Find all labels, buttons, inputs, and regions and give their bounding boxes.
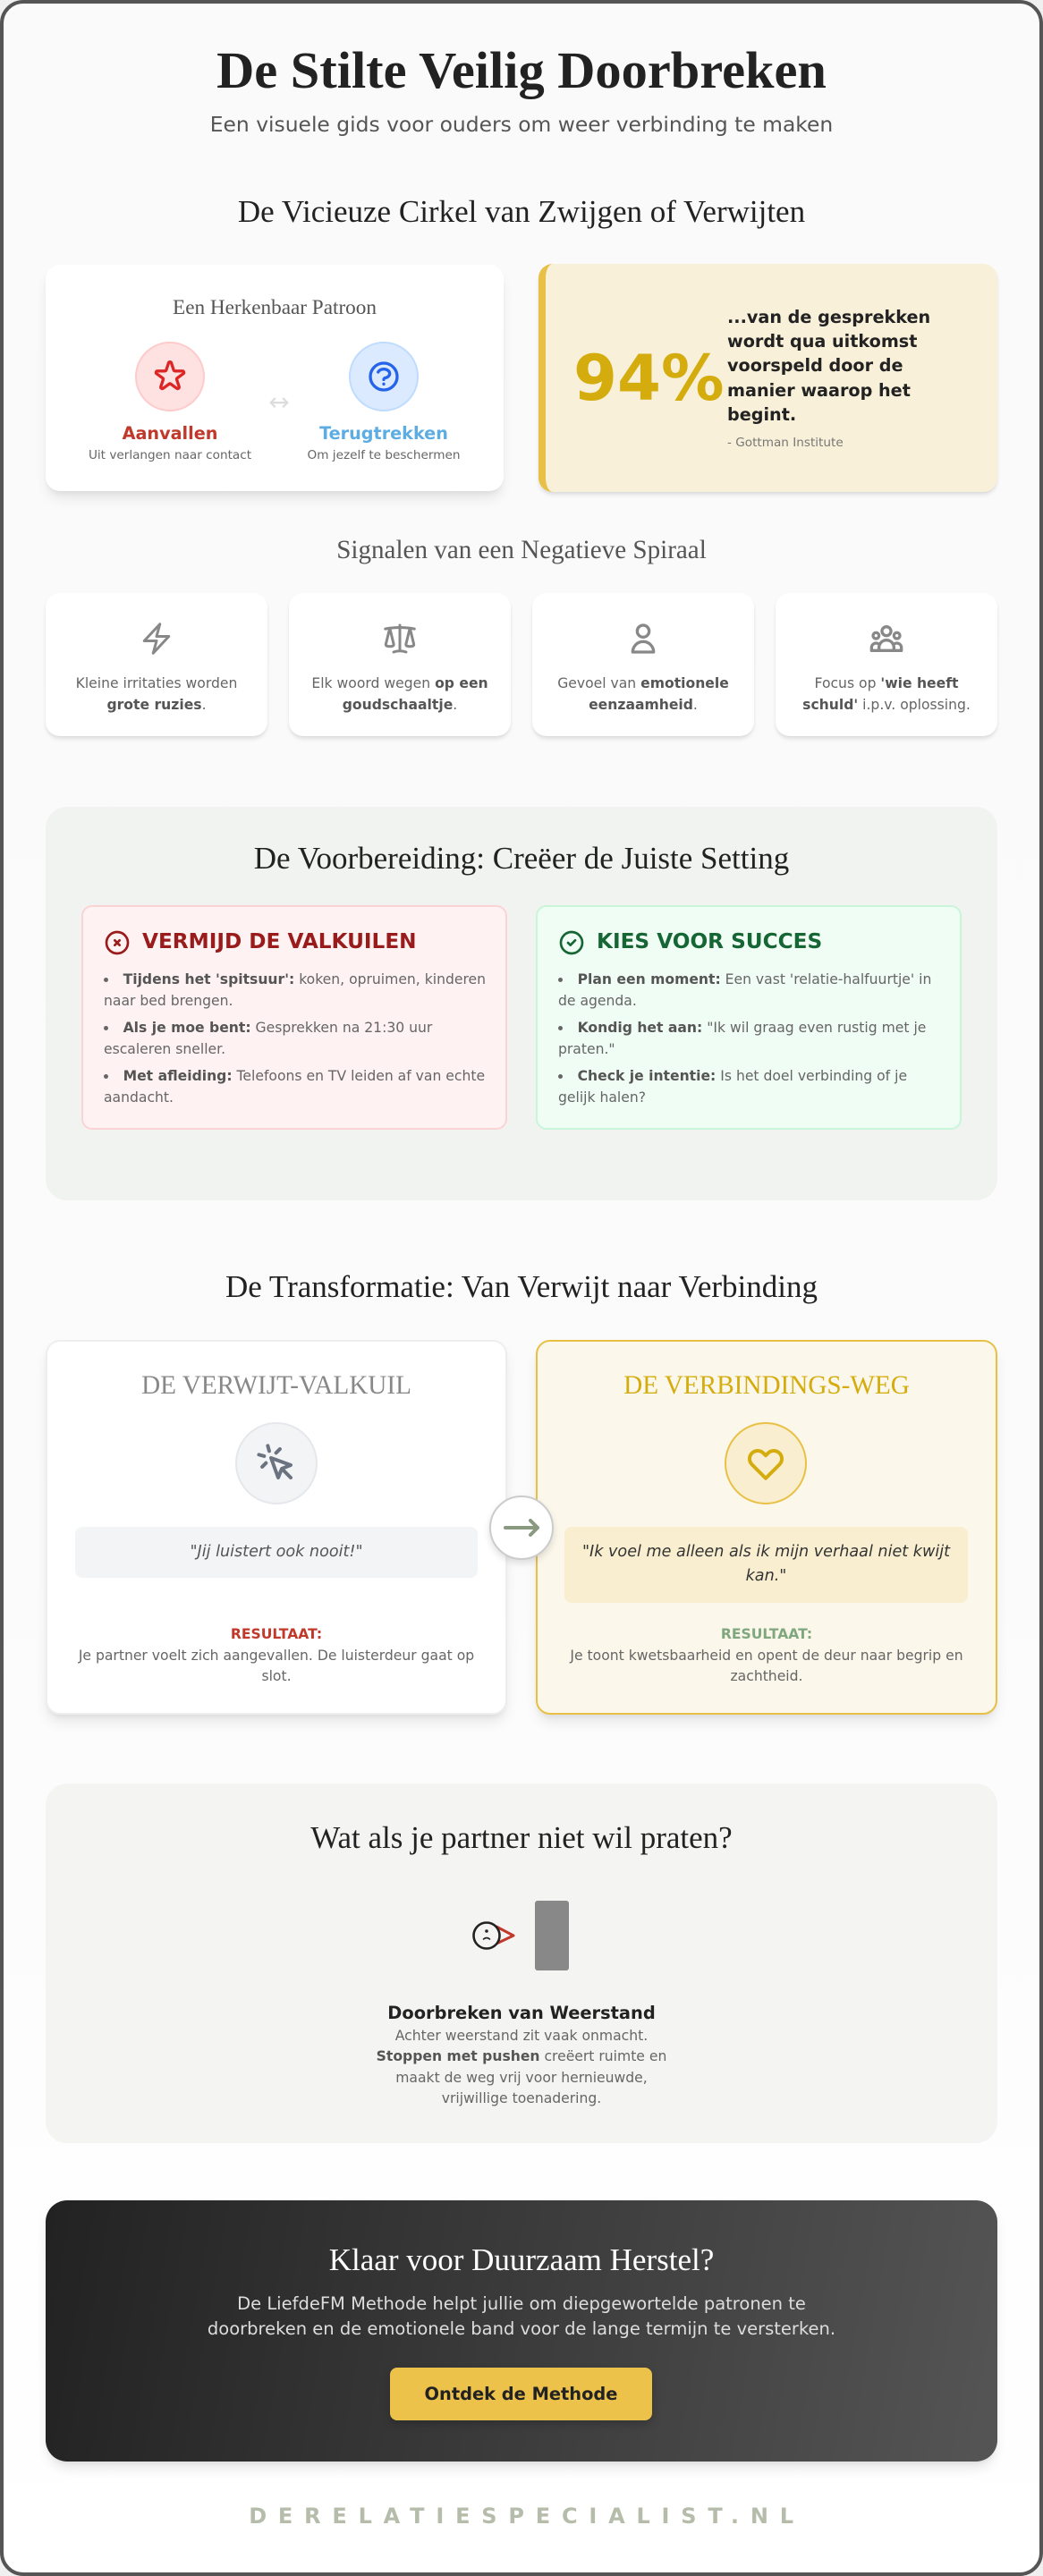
quote: connection <box>564 1527 968 1603</box>
cta text: doorbreken en de emotionele band voor de lange termijn te versterken. <box>208 2318 835 2339</box>
card: signal weighing words <box>289 593 511 736</box>
success list: de agenda. <box>558 993 637 1009</box>
stat description: voorspeld door de <box>727 355 903 376</box>
card: choose success <box>536 905 962 1130</box>
result: connection: RESULTAAT: <box>721 1626 812 1642</box>
resistance text: vrijwillige toenadering. <box>442 2090 601 2106</box>
success list: gelijk halen? <box>558 1089 646 1106</box>
signal text: schuld' i.p.v. oplossing. <box>802 696 971 712</box>
heading: vicious circle: De Vicieuze Cirkel van Zwijgen of Verwijten <box>238 194 805 229</box>
pitfalls list: escaleren sneller. <box>104 1041 225 1057</box>
cta button: Ontdek de Methode <box>425 2384 617 2404</box>
stat source: - Gottman Institute <box>727 436 844 450</box>
icon: check circle <box>560 930 583 955</box>
cta button <box>390 2368 652 2420</box>
success heading: KIES VOOR SUCCES <box>597 929 822 953</box>
stat description: begint. <box>727 404 796 425</box>
pitfalls list: Met afleiding: Telefoons en TV leiden af van echte <box>123 1068 485 1084</box>
icon: bolt <box>143 623 170 655</box>
connection heading: DE VERBINDINGS-WEG <box>623 1371 910 1400</box>
resistance heading: Doorbreken van Weerstand <box>387 2003 656 2023</box>
signal text <box>311 675 488 712</box>
success list: Check je intentie: Is het doel verbinding of je <box>578 1068 907 1084</box>
signal text: Focus op 'wie heeft <box>815 675 958 691</box>
signal text <box>557 675 729 712</box>
panel: preparation <box>46 807 997 1200</box>
heading: transformation: De Transformatie: Van Verwijt naar Verbinding <box>225 1269 818 1304</box>
icon: scale <box>384 624 416 653</box>
success list: praten." <box>558 1041 615 1057</box>
panel: call to action <box>46 2200 997 2462</box>
resistance text <box>377 2028 666 2106</box>
signal text: Gevoel van emotionele <box>557 675 729 691</box>
icon: group <box>869 625 903 652</box>
signal text <box>802 675 971 712</box>
signal text <box>76 675 237 712</box>
cta text: De LiefdeFM Methode helpt jullie om diepgewortelde patronen te <box>237 2293 806 2314</box>
stat description: wordt qua uitkomst <box>727 331 917 352</box>
icon: question withdraw <box>349 342 419 411</box>
panel: recognisable pattern <box>46 265 504 491</box>
signal text: eenzaamheid. <box>589 696 698 712</box>
stat description <box>727 307 930 425</box>
signal text: grote ruzies. <box>106 696 207 712</box>
signal text: Elk woord wegen op een <box>311 675 488 691</box>
icon: star attack <box>135 342 205 411</box>
card: signal loneliness <box>532 593 754 736</box>
caption: withdraw: Om jezelf te beschermen <box>308 448 460 462</box>
icon: person pushing against door <box>472 1901 569 1970</box>
cta text <box>208 2293 835 2339</box>
result: blame: slot. <box>261 1668 292 1684</box>
card: blame trap <box>46 1340 507 1715</box>
resistance text: Stoppen met pushen creëert ruimte en <box>377 2048 666 2064</box>
quote: connection: "Ik voel me alleen als ik mijn verhaal niet kwijt <box>582 1543 950 1561</box>
icon: user <box>632 623 655 654</box>
pitfalls list: Als je moe bent: Gesprekken na 21:30 uur <box>123 1020 432 1036</box>
footer brand: DERELATIESPECIALIST.NL <box>249 2504 805 2529</box>
preparation heading: De Voorbereiding: Creëer de Juiste Setting <box>254 841 789 876</box>
result: blame: Je partner voelt zich aangevallen. De luisterdeur gaat op <box>79 1648 474 1664</box>
card: connection path <box>536 1340 997 1715</box>
cta heading: Klaar voor Duurzaam Herstel? <box>329 2242 714 2277</box>
partner heading: Wat als je partner niet wil praten? <box>310 1820 733 1855</box>
quote: blame: "Jij luistert ook nooit!" <box>190 1543 363 1561</box>
card: avoid pitfalls <box>81 905 507 1130</box>
subtitle: Een visuele gids voor ouders om weer verbinding te maken <box>210 112 833 137</box>
pitfalls list: aandacht. <box>104 1089 174 1106</box>
pitfalls heading: VERMIJD DE VALKUILEN <box>142 929 417 953</box>
panel: 94 percent statistic <box>538 264 997 492</box>
result: connection <box>569 1626 963 1684</box>
stat number: 94% <box>573 342 724 415</box>
caption: attack: Uit verlangen naar contact <box>89 448 251 462</box>
signal text: Kleine irritaties worden <box>76 675 237 691</box>
result: blame <box>78 1626 474 1684</box>
pitfalls list: naar bed brengen. <box>104 993 233 1009</box>
stat description: manier waarop het <box>727 380 911 401</box>
arrow: from blame to connection <box>489 1496 554 1560</box>
panel: partner will not talk <box>46 1784 997 2143</box>
result: connection: zachtheid. <box>730 1668 802 1684</box>
icon: cursor click <box>235 1422 318 1504</box>
icon: x circle <box>106 930 129 955</box>
result: blame: RESULTAAT: <box>231 1626 322 1642</box>
success list <box>558 971 931 1106</box>
resistance text: maakt de weg vrij voor hernieuwde, <box>395 2070 648 2086</box>
quote: connection: kan." <box>746 1567 786 1585</box>
card: signal irritations <box>46 593 267 736</box>
panel heading: Een Herkenbaar Patroon <box>173 296 377 319</box>
pitfalls list: Tijdens het 'spitsuur': koken, opruimen, kinderen <box>123 971 486 987</box>
signal text: goudschaaltje. <box>343 696 457 712</box>
success list: Plan een moment: Een vast 'relatie-halfuurtje' in <box>578 971 931 987</box>
success list: Kondig het aan: "Ik wil graag even rustig met je <box>578 1020 926 1036</box>
quote: blame <box>75 1527 478 1578</box>
arrow: both directions: ↔ <box>268 387 290 417</box>
card: signal blame <box>776 593 997 736</box>
result: connection: Je toont kwetsbaarheid en opent de deur naar begrip en <box>570 1648 963 1664</box>
pitfalls list <box>104 971 486 1106</box>
heading: signals: Signalen van een Negatieve Spiraal <box>336 536 707 564</box>
label: withdraw: Terugtrekken <box>319 423 448 444</box>
title: De Stilte Veilig Doorbreken <box>216 41 827 99</box>
resistance text: Achter weerstand zit vaak onmacht. <box>395 2028 648 2044</box>
stat description: ...van de gesprekken <box>727 307 930 327</box>
icon: heart <box>725 1422 807 1504</box>
label: attack: Aanvallen <box>123 423 217 444</box>
blame trap heading: DE VERWIJT-VALKUIL <box>141 1371 411 1400</box>
